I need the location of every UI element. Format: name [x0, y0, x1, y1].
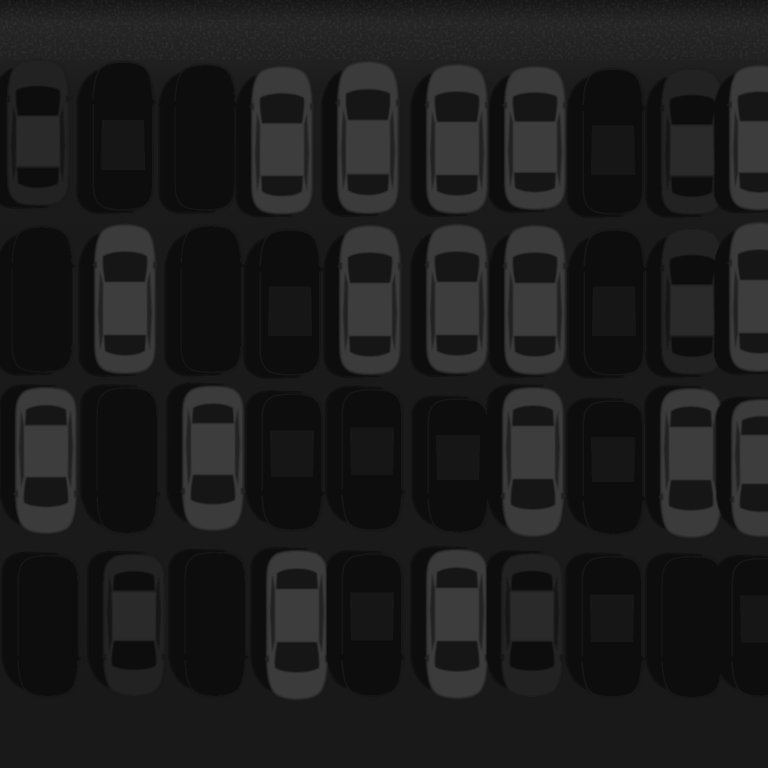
asphalt texture strip: [0, 0, 768, 60]
row 4 of cars: [2, 547, 768, 699]
row 2 of cars: [0, 223, 768, 378]
row 1 of cars: [0, 60, 768, 217]
row 3 of cars: [0, 383, 768, 537]
